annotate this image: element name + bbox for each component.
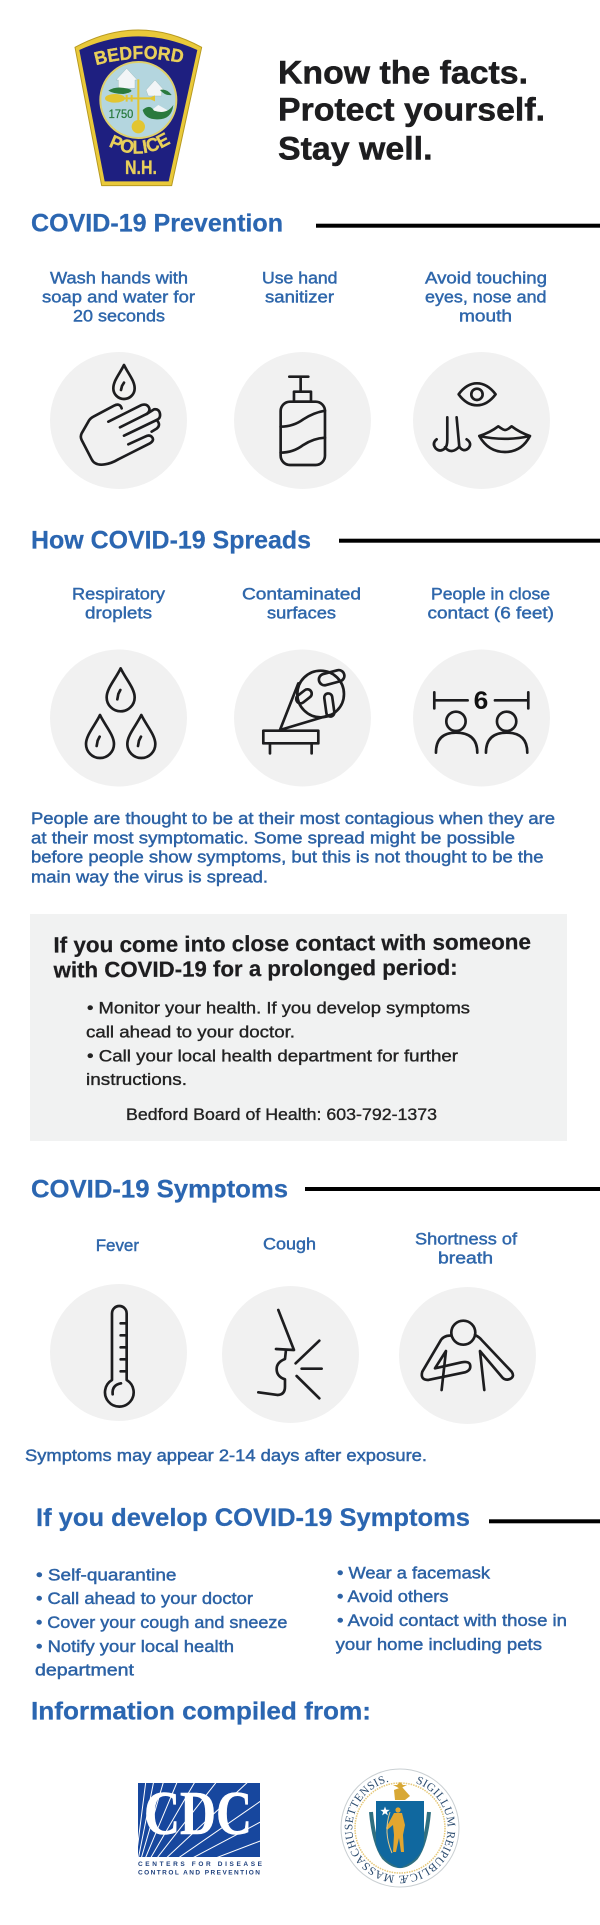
label: fever: Fever [96,1236,139,1255]
list: left column: • Self-quarantine [36,1565,176,1584]
icon: sanitizer bottle [234,352,371,489]
list: right column: • Avoid contact with those in [337,1611,567,1630]
heading: symptoms: COVID-19 Symptoms [31,1176,288,1204]
callout heading [52,929,531,983]
list: left column: • Call ahead to your doctor [36,1589,253,1608]
icon: eye, nose and mouth [413,352,550,489]
list: right column: your home including pets [336,1635,542,1654]
callout bullets: call ahead to your doctor. [86,1023,295,1041]
heading: spreads: How COVID-19 Spreads [31,526,311,554]
heading: symptoms [31,1176,600,1204]
icon: contaminated surface [234,650,371,786]
title: Stay well. [278,130,432,166]
label: avoid touching: mouth [459,306,512,325]
icon: thermometer [50,1284,187,1421]
label: shortness of breath: Shortness of [415,1229,517,1248]
title [278,54,545,166]
list: left column: • Notify your local health [36,1637,234,1656]
title: Know the facts. [278,54,528,90]
heading: information compiled from: Information compiled from: [31,1697,371,1725]
list: right column: • Avoid others [337,1587,448,1606]
heading: prevention: COVID-19 Prevention [31,210,283,238]
icon: Bedford Police badge: 1750 [109,107,134,121]
label: wash hands: 20 seconds [73,306,165,325]
label: hand sanitizer [262,268,338,306]
label: respiratory droplets: Respiratory [72,584,166,603]
text block: contagious paragraph: People are thought to be at their most contagious when they are [31,809,555,828]
callout bullets: • Call your local health department for further [87,1047,459,1065]
callout heading: with COVID-19 for a prolonged period: [53,955,458,983]
label: wash hands [42,268,195,325]
text block: contagious paragraph: main way the virus is spread. [31,867,268,886]
heading: if you develop: If you develop COVID-19 Symptoms [36,1504,470,1532]
label: shortness of breath: breath [438,1248,493,1267]
label: avoid touching: eyes, nose and [425,287,546,306]
callout bullets: instructions. [86,1071,187,1089]
note: symptom onset: Symptoms may appear 2-14 days after exposure. [25,1446,427,1465]
list: left column: • Cover your cough and sneeze [36,1613,287,1632]
label: contaminated surfaces [242,584,361,622]
icon: Bedford Police badge [74,30,202,186]
title: Protect yourself. [278,92,545,128]
label: close contact: contact (6 feet) [428,603,554,622]
panel: How COVID-19 Spreads [31,526,600,886]
heading: prevention [31,210,600,238]
icon: three droplets [50,650,187,786]
list: left column [35,1565,287,1680]
label: contaminated surfaces: surfaces [267,603,336,622]
logo: Massachusetts seal: SIGILLUM REIPUBLICÆ MASSACHUSETTENSIS. [344,1776,456,1884]
text block: contagious paragraph: at their most symptomatic. Some spread might be possible [31,828,515,847]
icon: six feet apart [413,650,550,786]
panel: close contact callout [30,914,567,1141]
label: shortness of breath [415,1229,517,1267]
icon: hand and water drop [50,352,187,489]
label: hand sanitizer: sanitizer [265,287,334,306]
callout heading: If you come into close contact with someone [53,929,531,957]
list: right column [336,1563,567,1654]
label: respiratory droplets: droplets [85,603,152,622]
text block: contagious paragraph: before people show symptoms, but this is not thought to be the [31,847,544,866]
panel: If you develop symptoms [35,1504,600,1680]
label: cough: Cough [263,1234,316,1253]
heading: spreads [31,526,600,554]
icon: Bedford Police badge: POLICE [109,132,171,154]
icon: cough [222,1286,359,1423]
label: respiratory droplets [72,584,166,622]
list: right column: • Wear a facemask [337,1563,491,1582]
label: hand sanitizer: Use hand [262,268,338,287]
icon: Bedford Police badge: BEDFORD [94,46,184,66]
list: left column: department [35,1661,134,1680]
callout bullets [86,999,470,1089]
icon: shortness of breath [399,1287,536,1424]
panel: COVID-19 Prevention [31,210,600,489]
logo: CDC [138,1783,262,1874]
callout bullets: • Monitor your health. If you develop symptoms [87,999,470,1017]
icon: six feet apart: 6 [474,687,488,715]
icon: Bedford Police badge: N.H. [125,158,157,179]
label: close contact: People in close [431,584,550,603]
label: avoid touching: Avoid touching [425,268,547,287]
label: contaminated surfaces: Contaminated [242,584,361,603]
text block: contagious paragraph [31,809,555,886]
logo: CDC: CENTERS FOR DISEASE [138,1861,263,1868]
logo: CDC: CDC [144,1780,252,1848]
label: close contact [428,584,554,622]
label: wash hands: soap and water for [42,287,195,306]
callout phone number: Bedford Board of Health: 603-792-1373 [126,1106,437,1124]
panel: COVID-19 Symptoms [25,1176,600,1465]
logo: CDC: CONTROL AND PREVENTION [138,1870,260,1876]
label: avoid touching [425,268,547,325]
label: wash hands: Wash hands with [50,268,188,287]
